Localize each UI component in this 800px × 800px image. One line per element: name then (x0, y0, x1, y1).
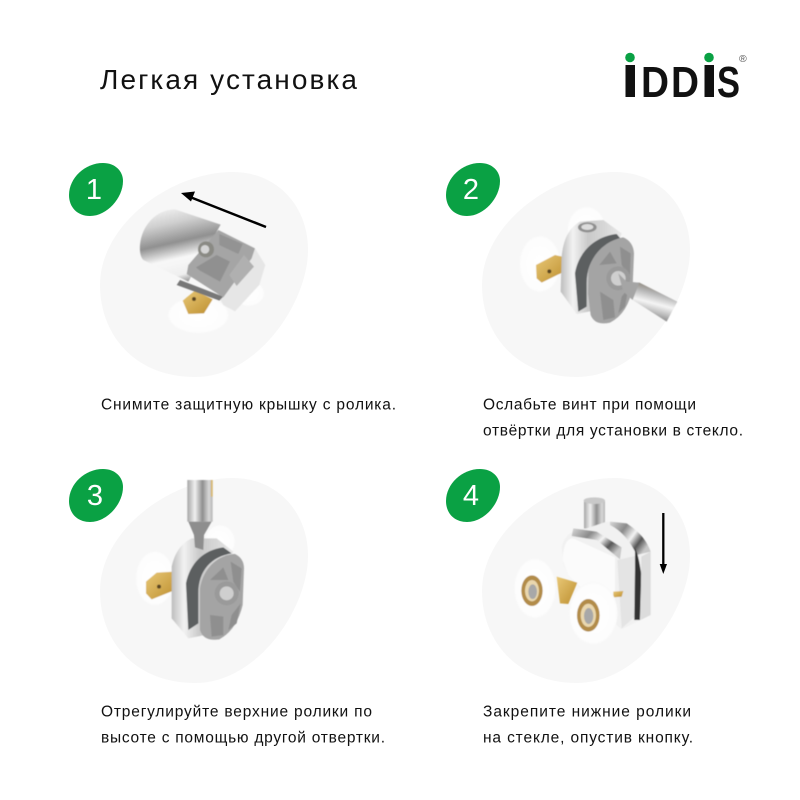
photo: assembled roller on glass (514, 497, 651, 645)
photo: roller with cover being removed (140, 209, 265, 333)
badge: step 1 number: 1 (86, 174, 102, 206)
logo: IDDIS (625, 53, 747, 107)
arrow: push button down (660, 513, 667, 574)
photo: loosening screw with screwdriver (519, 207, 677, 323)
arrow: slide cover left (181, 192, 266, 227)
caption 2: отвёртки для установки в стекло. (483, 422, 743, 440)
badge: step 3 number: 3 (87, 480, 103, 512)
title: Легкая установка (100, 64, 357, 95)
badge: step 1 number (69, 163, 123, 216)
panel: step 3 (69, 469, 385, 746)
badge: step 4 number: 4 (463, 480, 479, 512)
caption 2 (483, 396, 743, 440)
caption 3: высоте с помощью другой отвертки. (101, 730, 385, 746)
logo: IDDIS: D (671, 58, 699, 107)
logo: IDDIS: S (717, 58, 740, 107)
caption 4: на стекле, опустив кнопку. (483, 730, 693, 746)
panel: step 4 (446, 469, 693, 746)
panel: step 2 (446, 163, 743, 440)
caption 1: Снимите защитную крышку с ролика. (101, 396, 396, 414)
caption 3: Отрегулируйте верхние ролики по (101, 704, 372, 720)
panel: step 1 (69, 163, 396, 414)
logo: IDDIS: D (641, 58, 669, 107)
caption 4: Закрепите нижние ролики (483, 704, 691, 720)
caption 3 (101, 704, 385, 746)
caption 4 (483, 704, 693, 746)
photo: height adjustment with screwdriver (136, 480, 244, 640)
caption 2: Ослабьте винт при помощи (483, 396, 696, 414)
logo: IDDIS: ® (739, 53, 747, 65)
badge: step 2 number (446, 163, 500, 216)
badge: step 2 number: 2 (463, 174, 479, 206)
badge: step 4 number (446, 469, 500, 522)
badge: step 3 number (69, 469, 123, 522)
